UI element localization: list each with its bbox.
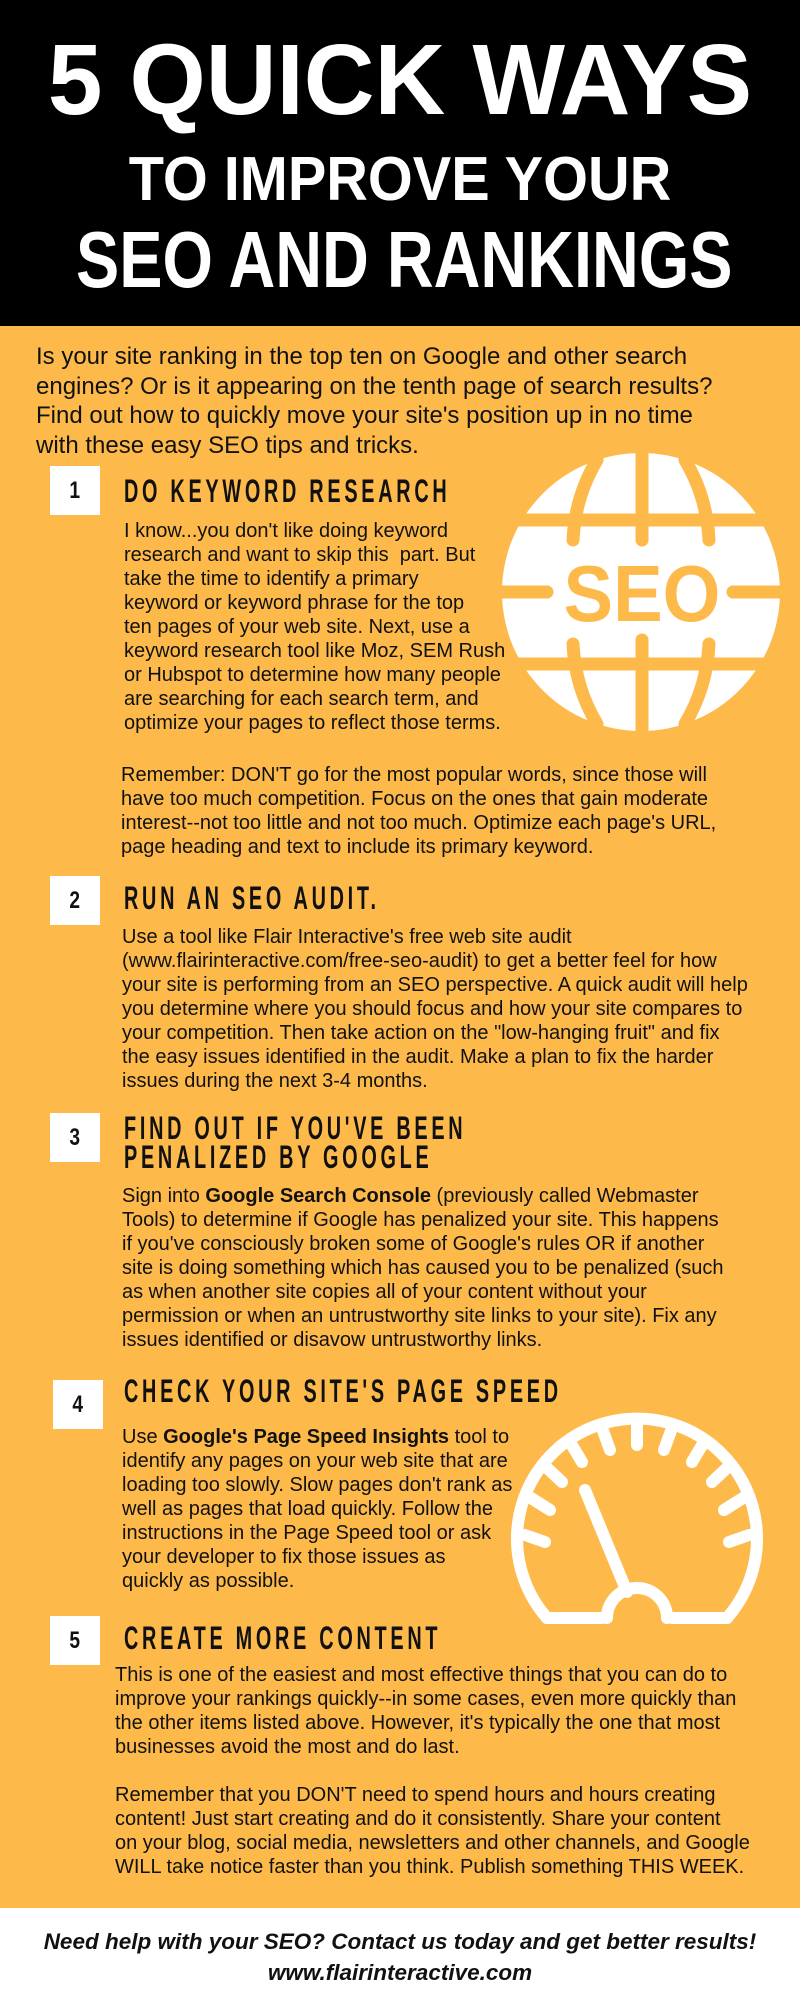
remember paragraph 1: Remember: DON'T go for the most popular words, since those will (121, 764, 707, 786)
title header: 5 QUICK WAYS (48, 24, 752, 136)
text 4 (122, 1426, 512, 1592)
number 3 (50, 1113, 100, 1162)
text 5: businesses avoid the most and do last. (115, 1736, 460, 1758)
number 1: 1 (70, 477, 80, 504)
number 1 (50, 466, 100, 515)
text 4: Use Google's Page Speed Insights tool to (122, 1426, 509, 1448)
heading 4: CHECK YOUR SITE'S PAGE SPEED (124, 1373, 562, 1409)
remember paragraph 5: on your blog, social media, newsletters and other channels, and Google (115, 1832, 750, 1854)
intro text: Find out how to quickly move your site's position up in no time (36, 402, 693, 429)
remember paragraph 5: WILL take notice faster than you think. Publish something THIS WEEK. (115, 1856, 744, 1878)
text 1 (124, 520, 505, 734)
intro text: Is your site ranking in the top ten on Google and other search (36, 343, 687, 370)
text 1: keyword research tool like Moz, SEM Rush (124, 640, 505, 662)
text 5: improve your rankings quickly--in some cases, even more quickly than (115, 1688, 736, 1710)
number 2: 2 (70, 887, 80, 914)
text 3: Sign into Google Search Console (previously called Webmaster (122, 1185, 699, 1207)
text 3: permission or when an untrustworthy site links to your site). Fix any (122, 1305, 717, 1327)
text 3: if you've consciously broken some of Google's rules OR if another (122, 1233, 704, 1255)
heading 2: RUN AN SEO AUDIT. (124, 880, 380, 916)
remember paragraph 5: Remember that you DON'T need to spend hours and hours creating (115, 1784, 715, 1806)
text 2: issues during the next 3-4 months. (122, 1070, 428, 1092)
title header: TO IMPROVE YOUR (129, 145, 671, 214)
text 3: issues identified or disavow untrustworthy links. (122, 1329, 542, 1351)
text 3: as when another site copies all of your content without your (122, 1281, 647, 1303)
heading 3 (124, 1110, 466, 1175)
number 4: 4 (73, 1391, 83, 1418)
text 1: are searching for each search term, and (124, 688, 479, 710)
text 1: I know...you don't like doing keyword (124, 520, 448, 542)
remember paragraph 5 (115, 1784, 750, 1878)
remember paragraph 5: content! Just start creating and do it consistently. Share your content (115, 1808, 721, 1830)
text 4: loading too slowly. Slow pages don't rank as (122, 1474, 512, 1496)
text 2: your site is performing from an SEO perspective. A quick audit will help (122, 974, 748, 996)
remember paragraph 1: have too much competition. Focus on the ones that gain moderate (121, 788, 708, 810)
remember paragraph 1: interest--not too little and not too much. Optimize each page's URL, (121, 812, 716, 834)
intro text (36, 343, 712, 458)
text 2: the easy issues identified in the audit. Make a plan to fix the harder (122, 1046, 713, 1068)
remember paragraph 1 (121, 764, 716, 858)
text 3 (122, 1185, 723, 1351)
text 5: This is one of the easiest and most effective things that you can do to (115, 1664, 727, 1686)
text 4: your developer to fix those issues as (122, 1546, 446, 1568)
icon: SEO globe (502, 453, 780, 731)
number 5 (50, 1616, 100, 1665)
intro text: with these easy SEO tips and tricks. (36, 432, 419, 458)
footer: Need help with your SEO? Contact us today and get better results! (44, 1929, 756, 1954)
text 5 (115, 1664, 736, 1758)
remember paragraph 1: page heading and text to include its primary keyword. (121, 836, 594, 858)
heading 3: FIND OUT IF YOU'VE BEEN (124, 1110, 466, 1146)
heading 3: PENALIZED BY GOOGLE (124, 1139, 432, 1175)
text 1: ten pages of your web site. Next, use a (124, 616, 470, 638)
text 2: you determine where you should focus and how your site compares to (122, 998, 742, 1020)
text 1: take the time to identify a primary (124, 568, 419, 590)
number 5: 5 (70, 1627, 80, 1654)
heading 5: CREATE MORE CONTENT (124, 1620, 441, 1656)
text 2: (www.flairinteractive.com/free-seo-audit) to get a better feel for how (122, 950, 717, 972)
text 4: well as pages that load quickly. Follow the (122, 1498, 493, 1520)
text 3: site is doing something which has caused you to be penalized (such (122, 1257, 723, 1279)
text 2: your competition. Then take action on the "low-hanging fruit" and fix (122, 1022, 720, 1044)
number 3: 3 (70, 1124, 80, 1151)
text 1: or Hubspot to determine how many people (124, 664, 501, 686)
number 4 (53, 1380, 103, 1429)
text 1: research and want to skip this part. But (124, 544, 475, 566)
text 4: identify any pages on your web site that are (122, 1450, 508, 1472)
text 1: keyword or keyword phrase for the top (124, 592, 464, 614)
text 4: instructions in the Page Speed tool or ask (122, 1522, 491, 1544)
icon: SEO globe: SEO (564, 549, 720, 638)
text 2: Use a tool like Flair Interactive's free web site audit (122, 926, 572, 948)
text 5: the other items listed above. However, it's typically the one that most (115, 1712, 720, 1734)
intro text: engines? Or is it appearing on the tenth page of search results? (36, 372, 712, 400)
title header: SEO AND RANKINGS (76, 215, 732, 304)
text 4: quickly as possible. (122, 1570, 294, 1592)
title header (0, 0, 800, 326)
icon: speedometer (511, 1412, 763, 1624)
heading 1: DO KEYWORD RESEARCH (124, 473, 450, 509)
footer (0, 1908, 800, 2000)
text 3: Tools) to determine if Google has penalized your site. This happens (122, 1209, 719, 1231)
number 2 (50, 876, 100, 925)
text 1: optimize your pages to reflect those terms. (124, 712, 501, 734)
text 2 (122, 926, 748, 1092)
footer: www.flairinteractive.com (268, 1960, 532, 1985)
